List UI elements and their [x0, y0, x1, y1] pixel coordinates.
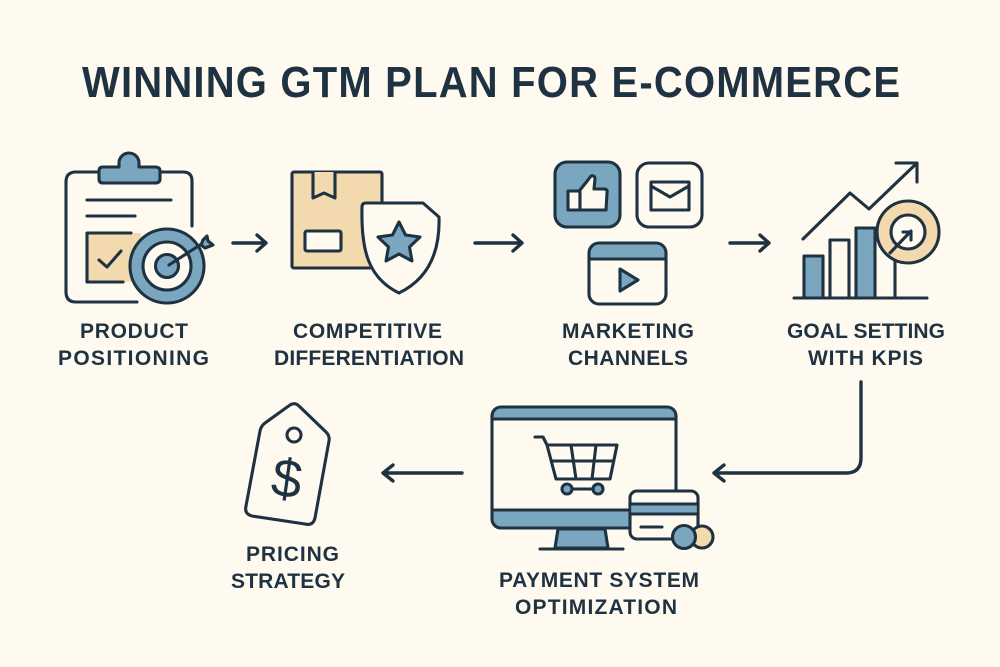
label: marketing channels: MARKETING: [562, 320, 694, 343]
icon: clipboard with target: [66, 153, 213, 303]
step: goal setting with KPIs: [787, 163, 945, 370]
label: marketing channels: [562, 320, 694, 370]
label: competitive differentiation: [274, 320, 464, 370]
arrow: positioning to differentiation: [233, 235, 266, 251]
label: payment system optimization: [499, 569, 699, 619]
label: payment system optimization: PAYMENT SYSTEM: [499, 569, 699, 592]
label: marketing channels: CHANNELS: [568, 347, 688, 370]
icon: thumbs up tile: [555, 162, 620, 227]
step: competitive differentiation: [274, 172, 464, 370]
label: competitive differentiation: COMPETITIVE: [293, 320, 442, 343]
label: goal setting with KPIs: [787, 320, 945, 370]
label: product positioning: PRODUCT: [80, 320, 188, 343]
arrow: payment to pricing: [383, 465, 462, 481]
icon: email tile: [637, 163, 702, 227]
icon: video tile: [589, 243, 666, 304]
label: competitive differentiation: DIFFERENTIATION: [274, 347, 464, 370]
label: product positioning: POSITIONING: [58, 347, 209, 370]
label: pricing strategy: PRICING: [246, 543, 339, 566]
label: goal setting with KPIs: GOAL SETTING: [787, 320, 945, 343]
step: pricing strategy: [231, 404, 345, 593]
label: goal setting with KPIs: WITH KPIS: [808, 347, 923, 370]
arrow: differentiation to channels: [475, 235, 522, 251]
step: payment system optimization: [492, 407, 713, 619]
icon: price tag: $: [268, 447, 306, 511]
label: product positioning: [58, 320, 209, 370]
icon: box with shield and star: [292, 172, 439, 293]
icon: monitor with cart and card: [492, 407, 713, 549]
step: product positioning: [58, 153, 213, 370]
arrow: goals to payment: [714, 382, 861, 481]
title: WINNING GTM PLAN FOR E-COMMERCE: [82, 58, 900, 106]
icon: price tag: [246, 404, 329, 524]
label: pricing strategy: [231, 543, 345, 593]
step: marketing channels: [555, 162, 702, 370]
arrow: channels to goals: [730, 235, 769, 251]
label: payment system optimization: OPTIMIZATION: [515, 596, 677, 619]
label: pricing strategy: STRATEGY: [231, 570, 345, 593]
icon: bar chart with trend and target: [794, 163, 939, 298]
